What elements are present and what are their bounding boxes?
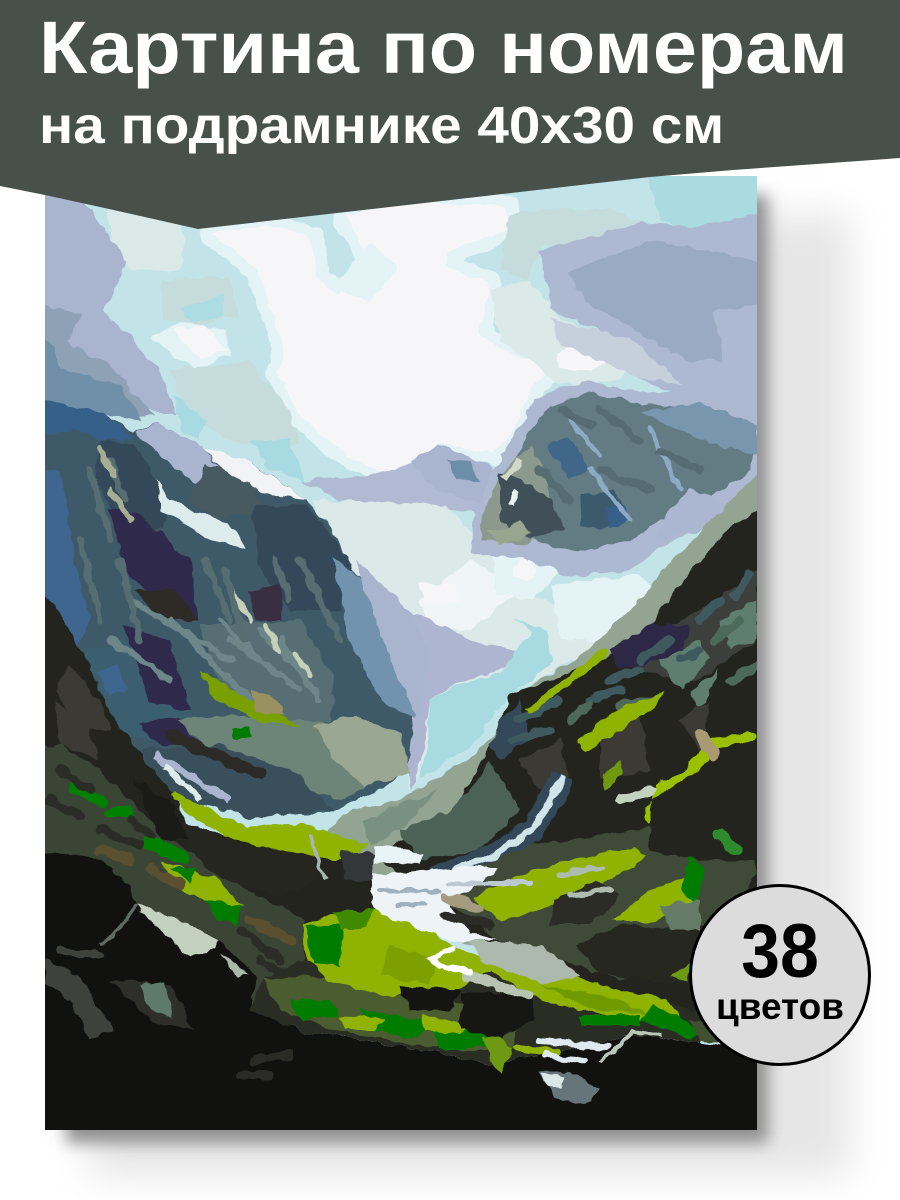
left mountain — [45, 400, 416, 820]
badge number: 38 — [741, 909, 819, 994]
river valley and meadow — [250, 846, 757, 1105]
black foreground — [45, 852, 757, 1130]
painting — [45, 176, 757, 1130]
right dark slope — [327, 475, 757, 1012]
canvas drop shadow — [66, 195, 850, 1175]
right mountain peak — [410, 387, 780, 570]
sky — [45, 176, 757, 1066]
title: Картина по номерам — [39, 6, 848, 89]
header banner — [0, 0, 900, 229]
badge: number of colours — [689, 884, 871, 1066]
left dark slope — [45, 596, 376, 1026]
badge unit: цветов — [716, 986, 844, 1027]
subtitle: на подрамнике 40х30 см — [39, 97, 724, 155]
